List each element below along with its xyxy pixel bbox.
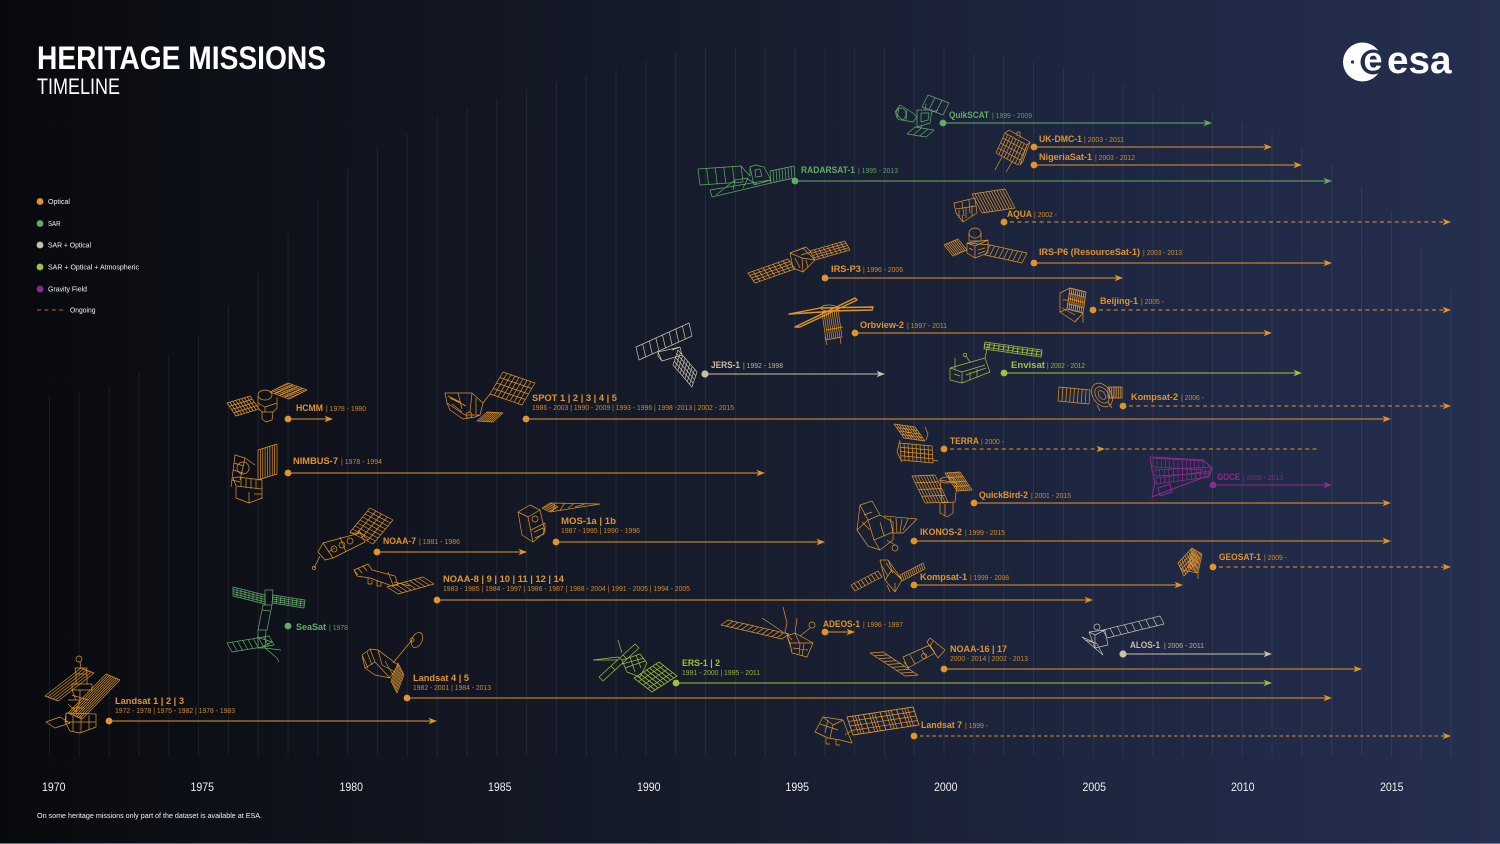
mission: IRS-P6: IRS-P6 (ResourceSat-1) xyxy=(1039,247,1140,258)
mission: TERRA xyxy=(894,424,1320,463)
mission: IRS-P3: | 1996 - 2006 xyxy=(863,266,903,274)
legend: Optical xyxy=(48,199,70,206)
mission: Envisat xyxy=(950,342,1302,383)
mission: SPOT 1-5: 1986 - 2003 | 1990 - 2009 | 1993 - 1996 | 1998 -2013 | 2002 - 2015 xyxy=(532,404,734,412)
mission: Landsat 1, 2, 3 xyxy=(45,656,437,733)
mission: SeaSat xyxy=(227,587,348,662)
mission: HCMM: HCMM xyxy=(296,403,323,414)
mission: QuikSCAT xyxy=(895,95,1212,137)
mission: Kompsat-1 xyxy=(851,560,1183,592)
mission: IKONOS-2 xyxy=(857,501,1391,551)
mission: Orbview-2 xyxy=(789,298,1272,345)
year axis labels: 1985 xyxy=(488,782,512,794)
mission: QuikSCAT: | 1999 - 2009 xyxy=(992,112,1032,120)
footnote: On some heritage missions only part of the dataset is available at ESA. xyxy=(37,813,262,820)
mission: AQUA: AQUA xyxy=(1007,209,1032,220)
mission: GEOSAT-1 xyxy=(1178,548,1451,579)
mission: HCMM xyxy=(227,383,366,422)
mission: NOAA-7: NOAA-7 xyxy=(383,536,416,547)
mission: RADARSAT-1: | 1995 - 2013 xyxy=(858,167,898,175)
mission: Landsat 7 xyxy=(815,707,1451,745)
mission: ALOS-1: ALOS-1 xyxy=(1130,640,1161,651)
mission: QuickBird-2 xyxy=(912,472,1391,517)
mission: IRS-P3: IRS-P3 xyxy=(831,264,861,275)
mission: UK-DMC-1 and NigeriaSat-1: NigeriaSat-1 xyxy=(1039,152,1093,163)
esa logo: esa xyxy=(1387,40,1452,82)
mission: ALOS-1 xyxy=(1082,616,1272,658)
mission: Kompsat-2: Kompsat-2 xyxy=(1131,392,1178,403)
mission: IRS-P6: | 2003 - 2013 xyxy=(1143,249,1182,257)
mission: GOCE: GOCE xyxy=(1217,472,1240,483)
mission: GEOSAT-1: GEOSAT-1 xyxy=(1219,552,1262,563)
mission: ERS-1, 2: 1991 - 2000 | 1995 - 2011 xyxy=(682,669,760,677)
mission: Beijing-1 xyxy=(1060,288,1451,323)
mission: UK-DMC-1 and NigeriaSat-1: | 2003 - 2012 xyxy=(1095,154,1135,162)
mission: ADEOS-1: | 1996 - 1997 xyxy=(863,621,903,629)
year axis labels: 1970 xyxy=(42,782,66,794)
mission: MOS-1a, 1b: MOS-1a | 1b xyxy=(561,516,616,527)
mission: QuickBird-2: | 2001 - 2015 xyxy=(1031,492,1071,500)
mission: IKONOS-2: IKONOS-2 xyxy=(920,527,962,538)
mission: Landsat 4, 5 xyxy=(362,631,1332,701)
mission: NOAA-8 to 14: NOAA-8 | 9 | 10 | 11 | 12 | 14 xyxy=(443,574,565,585)
mission: Beijing-1: Beijing-1 xyxy=(1100,296,1139,307)
mission: Landsat 1, 2, 3: 1972 - 1978 | 1975 - 1982 | 1978 - 1983 xyxy=(115,707,235,715)
year axis labels xyxy=(42,782,1404,794)
legend: Ongoing xyxy=(70,308,96,314)
mission: Kompsat-2 xyxy=(1058,379,1451,411)
year axis labels: 2010 xyxy=(1231,782,1254,794)
title xyxy=(37,40,326,99)
year axis labels: 1980 xyxy=(340,782,363,794)
mission: NOAA-7: | 1981 - 1986 xyxy=(419,538,460,546)
mission: QuickBird-2: QuickBird-2 xyxy=(979,490,1028,501)
mission: ALOS-1: | 2006 - 2011 xyxy=(1164,642,1204,650)
mission: HCMM: | 1978 - 1980 xyxy=(326,405,366,413)
mission: Kompsat-1: | 1999 - 2008 xyxy=(970,574,1009,582)
mission: Envisat: | 2002 - 2012 xyxy=(1047,362,1085,370)
mission: SeaSat: | 1978 xyxy=(329,624,348,632)
mission: ERS-1, 2 xyxy=(593,640,1272,692)
mission: ADEOS-1: ADEOS-1 xyxy=(823,619,861,630)
year axis labels: 1990 xyxy=(637,782,660,794)
mission: GOCE: | 2009 - 2013 xyxy=(1243,474,1283,482)
mission: TERRA: | 2000 - xyxy=(981,438,1005,446)
mission: Landsat 4, 5: 1982 - 2001 | 1984 - 2013 xyxy=(413,684,491,692)
mission: MOS-1a, 1b: 1987 - 1995 | 1990 - 1996 xyxy=(561,527,640,535)
mission: Landsat 7: | 1999 - xyxy=(965,722,989,730)
mission: AQUA: | 2002 - xyxy=(1034,211,1058,219)
esa logo xyxy=(1343,40,1452,82)
year grid lines xyxy=(50,48,1451,756)
mission: AQUA xyxy=(954,189,1451,225)
year axis labels: 1995 xyxy=(786,782,809,794)
legend: Gravity Field xyxy=(48,286,87,294)
mission: IRS-P6 xyxy=(944,228,1332,266)
mission: JERS-1 xyxy=(636,323,885,387)
mission: Landsat 1, 2, 3: Landsat 1 | 2 | 3 xyxy=(115,696,184,707)
year axis labels: 2015 xyxy=(1380,782,1404,794)
year axis labels: 2000 xyxy=(934,782,958,794)
mission: Orbview-2: | 1997 - 2011 xyxy=(907,322,947,330)
mission: RADARSAT-1: RADARSAT-1 xyxy=(801,165,856,176)
mission: Orbview-2: Orbview-2 xyxy=(860,320,904,331)
mission: NIMBUS-7: | 1978 - 1994 xyxy=(341,458,382,466)
mission: JERS-1: JERS-1 xyxy=(711,360,741,371)
mission: JERS-1: | 1992 - 1998 xyxy=(743,362,783,370)
mission: SPOT 1-5 xyxy=(445,372,1391,422)
mission: SPOT 1-5: SPOT 1 | 2 | 3 | 4 | 5 xyxy=(532,393,618,404)
title: HERITAGE MISSIONS xyxy=(37,40,326,76)
mission: QuikSCAT: QuikSCAT xyxy=(949,110,989,121)
mission: NOAA-16, 17: NOAA-16 | 17 xyxy=(950,644,1007,655)
mission: IKONOS-2: | 1999 - 2015 xyxy=(965,529,1005,537)
legend xyxy=(37,198,139,314)
mission: GOCE xyxy=(1150,457,1332,497)
legend: SAR + Optical xyxy=(48,242,91,250)
mission: NOAA-16, 17: 2000 - 2014 | 2002 - 2013 xyxy=(950,655,1028,663)
mission: NOAA-7 xyxy=(312,508,527,570)
year axis labels: 2005 xyxy=(1082,782,1106,794)
mission: Kompsat-1: Kompsat-1 xyxy=(920,572,968,583)
mission: UK-DMC-1 and NigeriaSat-1: | 2003 - 2011 xyxy=(1084,136,1124,144)
mission: UK-DMC-1 and NigeriaSat-1 xyxy=(995,130,1302,172)
mission: Landsat 4, 5: Landsat 4 | 5 xyxy=(413,673,470,684)
esa logo: e xyxy=(1364,40,1382,78)
mission: TERRA: TERRA xyxy=(950,436,979,447)
mission: RADARSAT-1 xyxy=(698,165,1332,197)
mission: Landsat 7: Landsat 7 xyxy=(921,720,962,731)
legend: SAR + Optical + Atmospheric xyxy=(48,264,139,272)
mission: ADEOS-1 xyxy=(721,607,903,657)
mission: SeaSat: SeaSat xyxy=(296,622,327,633)
mission: NIMBUS-7 xyxy=(231,444,765,503)
mission: GEOSAT-1: | 2009 - xyxy=(1264,554,1288,562)
mission: ERS-1, 2: ERS-1 | 2 xyxy=(682,658,720,669)
mission: NOAA-8 to 14: 1983 - 1985 | 1984 - 1997 | 1986 - 1987 | 1988 - 2004 | 1991 - 2005 | 1994 - 2005 xyxy=(443,585,690,593)
mission: NIMBUS-7: NIMBUS-7 xyxy=(293,456,338,467)
legend: SAR xyxy=(48,221,60,228)
year axis labels: 1975 xyxy=(190,782,214,794)
mission: Envisat: Envisat xyxy=(1011,360,1046,371)
mission: Kompsat-2: | 2006 - xyxy=(1181,394,1205,402)
mission: UK-DMC-1 and NigeriaSat-1: UK-DMC-1 xyxy=(1039,134,1083,145)
mission: IRS-P3 xyxy=(748,241,1123,283)
mission: MOS-1a, 1b xyxy=(518,503,825,545)
title: TIMELINE xyxy=(37,74,120,99)
mission: NOAA-8 to 14 xyxy=(354,564,1093,603)
mission: NOAA-16, 17 xyxy=(870,638,1362,676)
mission: Beijing-1: | 2005 - xyxy=(1141,298,1165,306)
